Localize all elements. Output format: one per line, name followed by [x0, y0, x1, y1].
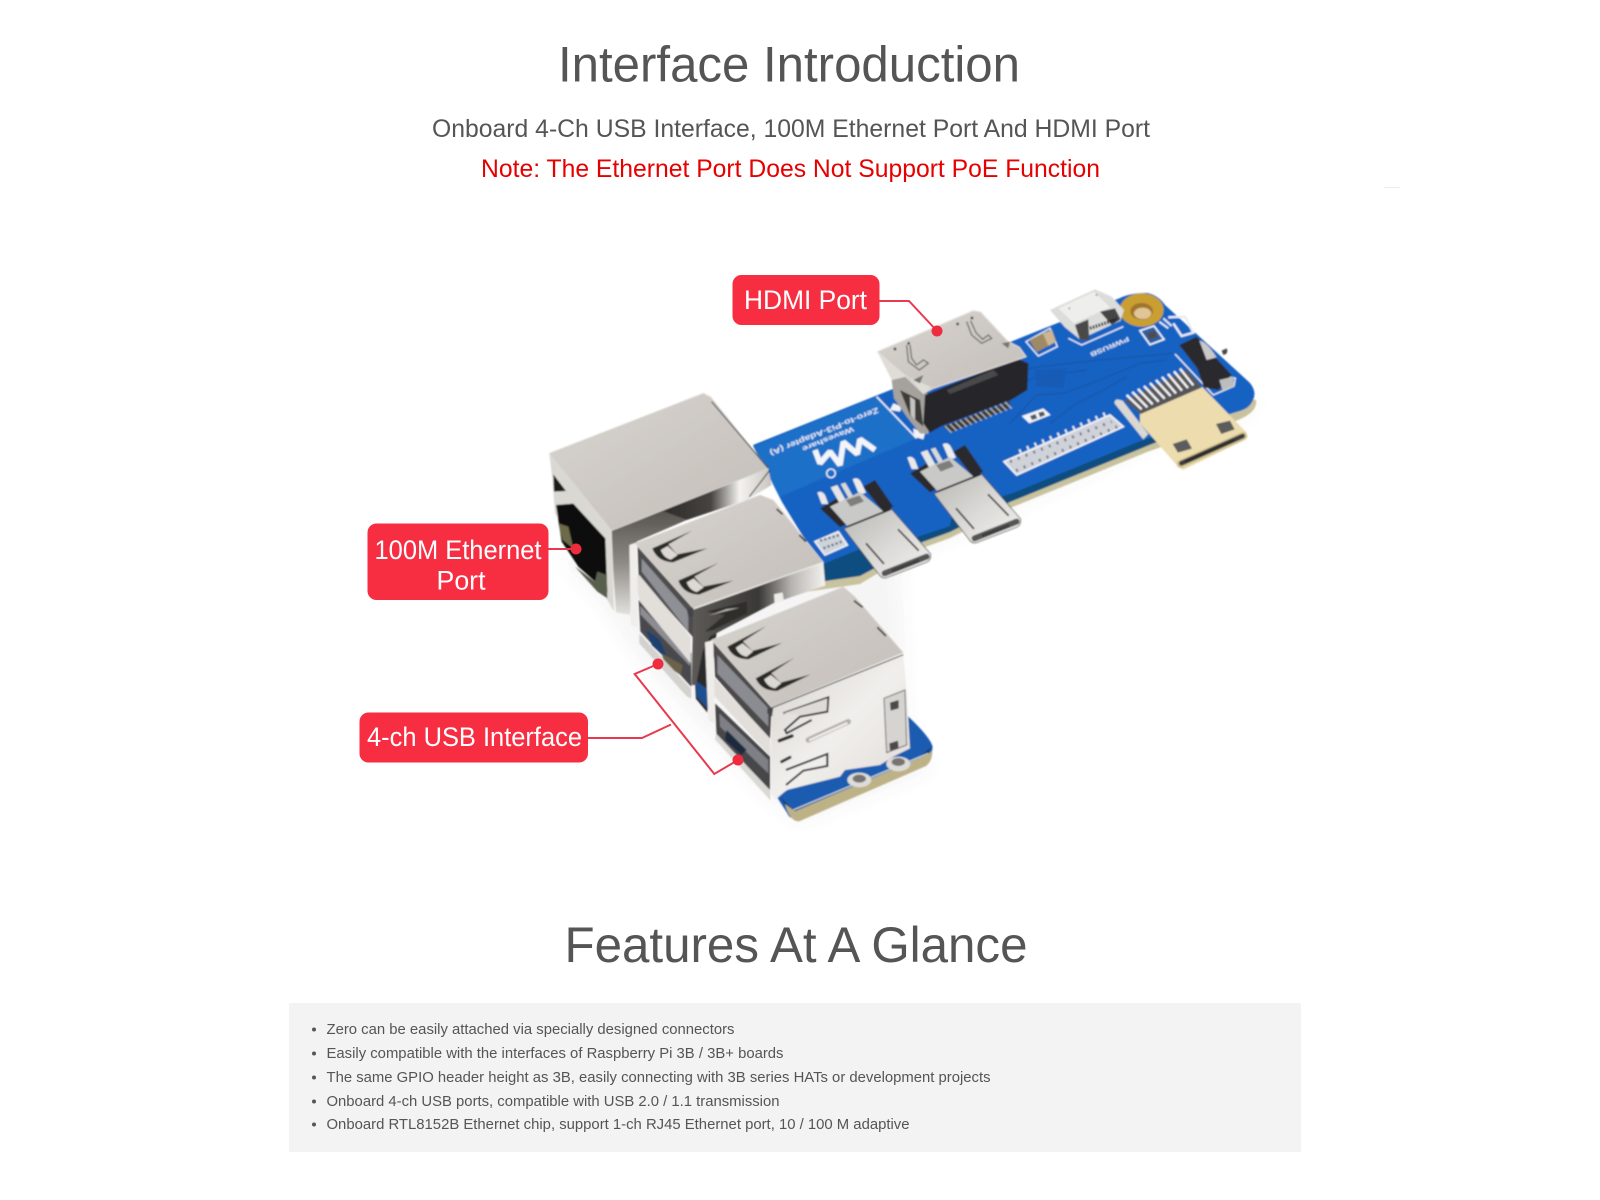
- micro usb plugs: [817, 443, 1021, 578]
- top micro usb: [1050, 289, 1130, 358]
- soft shadow under board: [560, 395, 1262, 822]
- ethernet jack: [549, 393, 772, 615]
- subtitle: Onboard 4-Ch USB Interface, 100M Ethernet Port And HDMI Port: [432, 115, 1150, 143]
- hdmi socket: [877, 311, 1028, 439]
- callout: hdmi port: HDMI Port: [744, 285, 867, 315]
- heading: features at a glance: Features At A Glance: [564, 916, 1028, 973]
- callout: 100M ethernet port: Port: [436, 566, 486, 596]
- small parts on tab: [815, 532, 847, 555]
- callout: 4-ch usb interface: 4-ch USB Interface: [367, 722, 582, 752]
- icon: mounting hole and parts: [1004, 289, 1247, 475]
- usb stack two and base pcb: [705, 587, 933, 821]
- feature item 3: The same GPIO header height as 3B, easily connecting with 3B series HATs or development projects: [326, 1070, 990, 1086]
- upper panel with logo: [753, 397, 917, 555]
- gold mini hdmi plug: [1114, 369, 1247, 470]
- feature item 4: Onboard 4-ch USB ports, compatible with USB 2.0 / 1.1 transmission: [326, 1094, 780, 1110]
- title: Interface Introduction: Interface Introduction: [558, 36, 1020, 92]
- feature item 2: Easily compatible with the interfaces of Raspberry Pi 3B / 3B+ boards: [326, 1046, 784, 1062]
- callout: 100M ethernet port: [368, 524, 582, 600]
- upper panel with logo: Waveshare: [801, 425, 855, 452]
- product photo: adapter board: [549, 289, 1262, 822]
- gpio pin header pads: [1004, 408, 1123, 475]
- callout: hdmi port: [732, 275, 942, 336]
- board traces: [963, 353, 1173, 423]
- logo: [815, 439, 875, 465]
- top micro usb: PWRUSB: [1088, 335, 1130, 358]
- usb stack one: [629, 495, 825, 685]
- capacitors: [1026, 328, 1057, 356]
- panel: features list: [289, 1003, 1301, 1152]
- feature item 5: Onboard RTL8152B Ethernet chip, support 1-ch RJ45 Ethernet port, 10 / 100 M adaptive: [326, 1117, 910, 1133]
- board lower layer edge: [805, 395, 1256, 592]
- board text: Zero-to-Pi3-Adapter (A): [768, 405, 880, 458]
- silk marks: [1168, 317, 1193, 336]
- feature item 1: Zero can be easily attached via specially designed connectors: [326, 1022, 734, 1038]
- callout: 4-ch usb interface: [360, 658, 744, 774]
- small component: [1140, 326, 1164, 345]
- callout: 100M ethernet port: 100M Ethernet: [374, 535, 542, 565]
- board top layer: [753, 293, 1254, 564]
- usb stack one lower port: [639, 600, 717, 713]
- slide switch: [1175, 337, 1235, 395]
- note in red: Note: The Ethernet Port Does Not Support PoE Function: [481, 155, 1100, 183]
